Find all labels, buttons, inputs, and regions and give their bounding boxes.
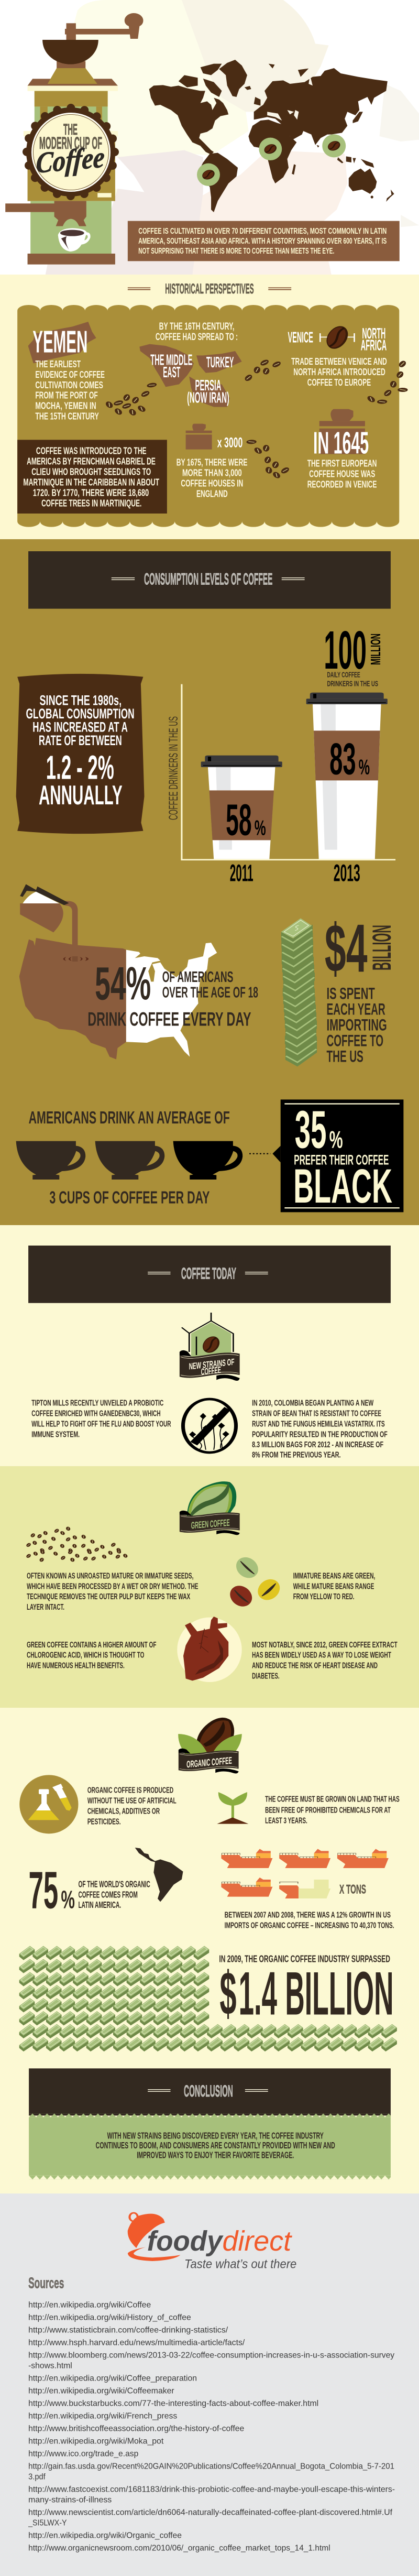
block: spread by the 16th century: THE MIDDLE [150,351,192,368]
watercolour background wash [46,0,419,275]
sources list: _SI5LWX-Y [28,2518,67,2527]
cup chart: 2011, 58%: 2011 [230,860,253,887]
section: historical perspectives: EVIDENCE OF COFFEE [35,370,105,380]
text: green coffee extract: DIABETES. [252,1671,280,1680]
block: spread by the 16th century: EAST [163,364,181,380]
sources list: http://www.hsph.harvard.edu/news/multimedia-article/facts/ [28,2338,245,2347]
cup chart: 2011, 58%: % [255,816,266,840]
block: 3 cups per day [16,1108,242,1207]
map marker: Southeast Asia [322,134,346,157]
section: historical perspectives: BY THE 16TH CENTURY, [159,321,234,332]
cup chart: 2013, 83% [306,693,388,887]
logo: foodydirect: foody [147,2225,224,2257]
text: OF THE WORLD'S ORGANIC [78,1879,150,1889]
section: consumption levels: ANNUALLY [39,780,123,811]
stat: $4 billion imports: THE US [326,1047,363,1066]
pictogram: cargo ships [221,1849,389,1898]
sources list: http://www.statisticbrain.com/coffee-drinking-statistics/ [28,2325,228,2334]
block: spread by the 16th century: PERSIA [195,377,221,394]
heading: coffee today [28,1246,391,1303]
section: coffee today [26,1313,388,1562]
block: introduced to the Americas [17,440,167,514]
icon: heart [177,1617,242,1682]
stat: 75% from Latin America: LATIN AMERICA. [78,1900,121,1910]
text: organic imports growth [225,1911,394,1930]
text: organic land requirement: LEAST 3 YEARS. [265,1816,307,1825]
cup chart: 2011, 58% [201,756,282,887]
text: immature and mature beans [293,1571,375,1601]
section: historical perspectives: MARTINIQUE IN THE CARIBBEAN IN ABOUT [23,477,159,488]
text: what is green coffee: LAYER INTACT. [27,1602,64,1612]
section: coffee today: GREEN COFFEE [191,1517,230,1531]
section: historical perspectives: (NOW IRAN) [187,389,229,406]
chart axis label: COFFEE DRINKERS IN THE US [167,716,181,820]
section: coffee today: NEW STRAINS OF [189,1357,234,1371]
heading: conclusion [148,2081,268,2100]
text: OVER THE AGE OF 18 [162,984,258,1001]
map: United States 54%: OF AMERICANS [162,968,233,985]
text: ORGANIC COFFEE [186,1755,232,1770]
stat: 75% from Latin America: % [61,1885,75,1914]
block: introduced to the Americas: COFFEE TREES IN MARTINIQUE. [41,498,141,509]
icon: no coffee rust sign [183,1399,236,1453]
coffee bag: global consumption: 1.2 - 2% [46,749,114,787]
text: WITHOUT THE USE OF ARTIFICIAL [87,1796,177,1805]
heading: consumption levels of coffee [28,551,391,609]
block: introduced to the Americas: 1720. BY 1770, THERE WERE 18,680 [33,488,149,498]
cup chart: 2013, 83%: % [359,755,370,779]
conclusion panel: CONCLUSION [184,2081,233,2100]
sources list: http://www.ico.org/trade_e.asp [28,2449,138,2458]
section: historical perspectives: CLIEU WHO BROUGHT SEEDLINGS TO [31,467,151,477]
sources list: http://en.wikipedia.org/wiki/Organic_coffee [28,2530,182,2540]
block: Yemen: THE EARLIEST [35,359,81,370]
cup chart: 2013, 83%: 2013 [334,860,360,887]
callout: 35% prefer black: 35 [295,1100,326,1159]
section: coffee today: COFFEE ENRICHED WITH GANEDENBC30, WHICH [31,1409,161,1418]
title badge: MODERN CUP OF [39,134,102,152]
text: organic land requirement [265,1795,400,1825]
logo: foodydirect: Taste what’s out there [184,2257,296,2271]
sources list: http://en.wikipedia.org/wiki/Coffee [28,2300,151,2309]
conclusion panel [29,2068,391,2179]
coffee bag: global consumption: RATE OF BETWEEN [39,733,122,748]
cup chart: 2013, 83%: 83 [329,734,356,784]
section: historical perspectives: COFFEE HOUSES IN [181,478,243,489]
logo: foodydirect: direct [222,2225,292,2257]
section: historical perspectives: FROM THE PORT OF [35,390,98,401]
pictogram: field of money [19,1946,397,2051]
map: United States 54% [19,938,258,1060]
block: 3000 coffee houses: MORE THAN 3,000 [182,468,242,478]
sources list: -shows.html [28,2361,72,2370]
map: United States 54%: 54% [95,957,151,1010]
sources list: http://en.wikipedia.org/wiki/Moka_pot [28,2436,163,2446]
illustration: coffee grinder [5,13,143,265]
section: historical perspectives: TURKEY [206,354,234,370]
section: conclusion: Sources [28,2274,64,2291]
text: Tipton Mills probiotic coffee [31,1398,171,1439]
heading: historical perspectives [128,281,291,297]
world map [149,60,394,212]
callout: 35% prefer black: % [329,1126,343,1153]
section: coffee today: WILL HELP TO FIGHT OFF THE FLU AND BOOST YOUR [31,1419,171,1428]
icon: flask and test tube [19,1775,78,1833]
icon: sprout [217,1792,248,1824]
section: consumption levels [16,551,395,887]
text: Tipton Mills probiotic coffee: IMMUNE SYSTEM. [31,1429,80,1439]
sources list: http://en.wikipedia.org/wiki/Coffeemaker [28,2386,174,2395]
section: historical perspectives: BY 1675, THERE WERE [177,457,247,468]
badge: new strains of coffee [180,1313,240,1381]
text: TECHNIQUE REMOVES THE OUTER PULP BUT KEEPS THE WAX [27,1592,190,1601]
section: historical perspectives: YEMEN [32,325,87,359]
section: consumption levels: HAS INCREASED AT A [32,719,128,735]
block: first European coffee house [307,409,377,490]
sources list [28,2300,395,2552]
chart axes [181,684,395,860]
intro text box [128,221,400,261]
section: historical perspectives [17,281,408,527]
cup chart: 2011, 58%: 58 [226,795,252,845]
stat: $4 billion imports [325,910,387,1066]
logo: foodydirect [128,2213,296,2271]
decorative coffee bean trails [105,359,408,479]
section: coffee today: TIPTON MILLS RECENTLY UNVEILED A PROBIOTIC [31,1398,163,1407]
text: organic definition: CHEMICALS, ADDITIVES OR [87,1806,160,1816]
text: conclusion body [96,2131,335,2160]
stat: 75% from Latin America: 75 [29,1860,58,1919]
pictogram: cargo ships: X TONS [339,1882,366,1896]
badge: organic coffee [178,1718,242,1774]
decorative bean cloud [26,1526,128,1562]
block: Venice and North Africa [288,324,387,388]
heading: coffee today: COFFEE TODAY [181,1265,236,1283]
text: GREEN COFFEE CONTAINS A HIGHER AMOUNT OF [27,1640,156,1650]
text: COFFEE COMES FROM [78,1890,138,1900]
stat: $1.4 billion [219,1954,394,2027]
stat: $1.4 billion: 1.4 [239,1959,277,2027]
sources list: http://en.wikipedia.org/wiki/History_of_coffee [28,2312,191,2322]
section: historical perspectives: AMERICAS BY FRENCHMAN GABRIEL DE [27,456,156,467]
text: ORGANIC COFFEE IS PRODUCED [87,1785,173,1795]
title badge [26,107,115,197]
block: spread by the 16th century [139,321,242,407]
illustration: coffee pot pouring [20,884,78,962]
callout: 35% prefer black [249,1099,403,1213]
map: Latin America [135,1848,183,1902]
sources list: http://en.wikipedia.org/wiki/Coffee_preparation [28,2373,197,2383]
map marker: Africa [259,138,282,160]
text: Colombia new strain [252,1398,388,1460]
coffee bag: global consumption: SINCE THE 1980s, [40,693,122,708]
panel: header [5,0,419,275]
stat: 100 million daily drinkers: DAILY COFFEE [327,671,360,680]
illustration: stack of money [281,918,317,1066]
sources list: http://en.wikipedia.org/wiki/French_press [28,2411,177,2420]
text: organic definition [87,1785,177,1826]
block: Yemen [28,322,105,422]
text: what is green coffee [27,1571,199,1612]
text: organic definition: PESTICIDES. [87,1817,121,1826]
stat: $1.4 billion: $ [219,1959,237,2027]
section: historical perspectives: THE 15TH CENTURY [35,411,99,422]
block: 3000 coffee houses: ENGLAND [196,489,228,499]
block: introduced to the Americas: COFFEE WAS INTRODUCED TO THE [36,446,147,456]
text: BILLION [367,925,396,970]
text: chlorogenic acid: HAVE NUMEROUS HEALTH BENEFITS. [27,1661,125,1670]
text: green coffee extract [252,1640,398,1680]
scalloped gold panel [17,305,399,527]
section: historical perspectives: COFFEE HAD SPREAD TO : [156,331,238,343]
sources list: many-strains-of-illness [28,2495,112,2504]
section: conclusion [28,2068,391,2291]
section: historical perspectives: x 3000 [217,435,242,451]
badge: new strains of coffee: COFFEE [201,1365,221,1377]
text: CHLOROGENIC ACID, WHICH IS THOUGHT TO [27,1651,145,1660]
section: consumption levels: GLOBAL CONSUMPTION [26,706,135,722]
badge: green coffee [180,1481,240,1535]
sources list: http://www.britishcoffeeassociation.org/the-history-of-coffee [28,2424,244,2433]
sources list: 3.pdf [28,2472,46,2481]
map marker: Latin America [197,163,220,186]
title badge: Coffee [35,141,105,180]
text: chlorogenic acid [27,1640,156,1670]
label: million: MILLION [368,634,383,665]
stat: 100 million daily drinkers [324,620,378,688]
icon: green, yellow and red beans [227,1556,283,1608]
block: Yemen: MOCHA, YEMEN IN [35,401,96,411]
title badge: THE [63,121,78,138]
coffee bag: global consumption [16,674,145,834]
block: 3000 coffee houses [177,424,247,499]
section: historical perspectives: CULTIVATION COMES [35,380,103,391]
block: Venice and North Africa: VENICE [288,329,313,346]
